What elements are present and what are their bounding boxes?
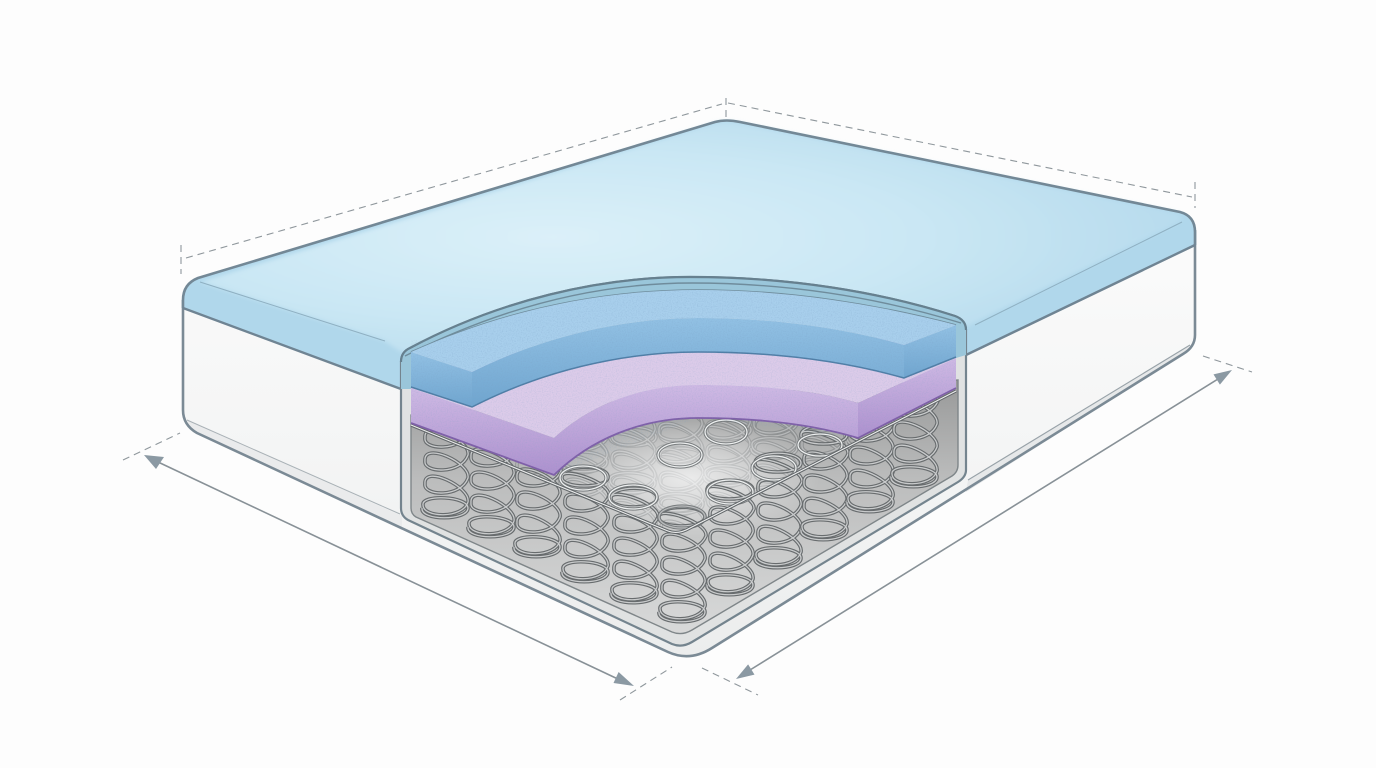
coil springs: front row <box>422 372 938 622</box>
mattress body side walls <box>183 230 1195 656</box>
blue right face <box>904 325 956 378</box>
infographic: mattress cutaway illustration <box>122 98 1252 700</box>
purple inner curved face <box>554 385 858 475</box>
purple left face <box>411 388 554 475</box>
blue left face <box>411 352 472 407</box>
glass band around foam <box>401 277 966 389</box>
arrow: front-left width dimension <box>144 455 634 686</box>
purple foam layer <box>411 336 956 475</box>
blue foam layer <box>411 290 956 407</box>
purple right face <box>858 358 956 438</box>
coil springs: rear rows <box>515 419 889 527</box>
highlighted top coil rings <box>560 420 842 528</box>
cap top surface <box>200 122 1182 352</box>
cutaway frame <box>401 277 966 646</box>
arrow: front-right length dimension <box>736 370 1232 679</box>
spring cavity <box>411 380 958 634</box>
dashed dimension guide lines <box>123 98 1252 700</box>
translucent haze over rear springs <box>560 418 820 538</box>
support plate wire <box>411 391 956 532</box>
blue inner curved face <box>472 318 904 407</box>
top comfort cap <box>183 120 1195 389</box>
